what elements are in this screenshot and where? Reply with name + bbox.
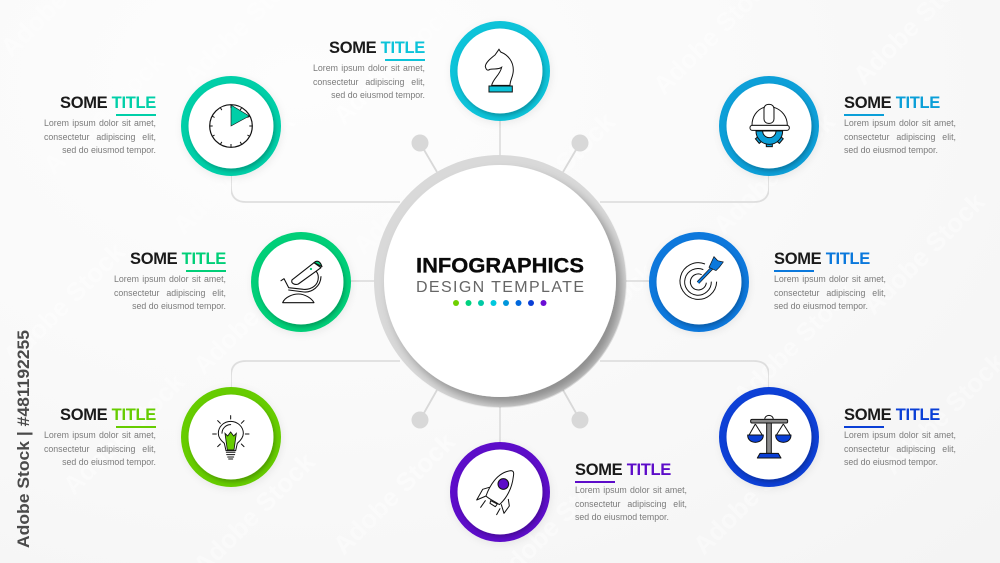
text: microscope: Lorem ipsum dolor sit amet, xyxy=(114,274,226,284)
text: target xyxy=(774,250,886,311)
stock id label: Adobe Stock | #481192255 xyxy=(14,330,33,548)
text: bulb: Lorem ipsum dolor sit amet, xyxy=(44,430,156,440)
watermark pattern: Adobe Stock xyxy=(327,426,461,560)
panel: scales xyxy=(719,387,956,489)
panel: target xyxy=(649,104,886,458)
panel: rocket xyxy=(450,442,687,544)
text: bulb: sed do eiusmod tempor. xyxy=(62,457,156,467)
text: bulb xyxy=(44,406,156,467)
text: chess: sed do eiusmod tempor. xyxy=(331,90,425,100)
text: target: sed do eiusmod tempor. xyxy=(774,301,868,311)
text: target: SOME TITLE xyxy=(774,250,870,268)
text: clock: sed do eiusmod tempor. xyxy=(62,145,156,155)
text: rocket: consectetur adipiscing elit, xyxy=(575,498,687,508)
text: helmet: consectetur adipiscing elit, xyxy=(844,132,956,142)
text: clock: Lorem ipsum dolor sit amet, xyxy=(44,118,156,128)
text: scales: sed do eiusmod tempor. xyxy=(844,457,938,467)
text: rocket xyxy=(575,461,687,522)
text: helmet: SOME TITLE xyxy=(844,94,940,112)
watermark pattern: Adobe Stock xyxy=(327,0,461,130)
panel: bulb xyxy=(44,387,282,489)
text: microscope xyxy=(114,250,226,311)
watermark pattern: Adobe Stock xyxy=(857,186,991,320)
central heading: DESIGN TEMPLATE xyxy=(416,279,584,296)
panel: microscope xyxy=(114,232,352,334)
text: clock: consectetur adipiscing elit, xyxy=(44,132,156,142)
text: target: Lorem ipsum dolor sit amet, xyxy=(774,274,886,284)
small connector dots xyxy=(412,134,588,428)
text: rocket: sed do eiusmod tempor. xyxy=(575,512,669,522)
text: scales xyxy=(844,406,956,467)
connector lines xyxy=(231,121,769,442)
panel: clock xyxy=(44,76,282,178)
text: helmet xyxy=(844,94,956,155)
text: chess: consectetur adipiscing elit, xyxy=(313,76,425,86)
central heading: INFOGRAPHICS xyxy=(416,254,584,278)
text: rocket: SOME TITLE xyxy=(575,461,671,479)
central circle xyxy=(374,155,627,408)
panel: helmet xyxy=(719,76,956,178)
watermark pattern: Adobe Stock xyxy=(0,236,131,370)
watermark pattern: Adobe Stock xyxy=(187,246,321,380)
text: helmet: sed do eiusmod tempor. xyxy=(844,145,938,155)
text: chess xyxy=(313,39,425,100)
text: scales: Lorem ipsum dolor sit amet, xyxy=(844,430,956,440)
panel: chess xyxy=(209,21,551,142)
text: clock xyxy=(44,58,490,155)
watermark pattern: Adobe Stock xyxy=(57,366,191,500)
text: rocket: Lorem ipsum dolor sit amet, xyxy=(575,485,687,495)
text: helmet: Lorem ipsum dolor sit amet, xyxy=(844,118,956,128)
colored dots row xyxy=(453,300,546,306)
watermark pattern: Adobe Stock xyxy=(167,106,301,240)
text: clock: SOME TITLE xyxy=(60,94,156,112)
central heading xyxy=(416,254,584,296)
text: chess: Lorem ipsum dolor sit amet, xyxy=(313,63,425,73)
watermark pattern: Adobe Stock xyxy=(347,126,481,260)
text: target: consectetur adipiscing elit, xyxy=(774,288,886,298)
text: microscope: sed do eiusmod tempor. xyxy=(132,301,226,311)
text: bulb: consectetur adipiscing elit, xyxy=(44,444,156,454)
watermark pattern: Adobe Stock xyxy=(487,106,621,240)
watermark pattern: Adobe Stock xyxy=(37,46,171,180)
text: scales: consectetur adipiscing elit, xyxy=(844,444,956,454)
text: chess: SOME TITLE xyxy=(329,39,425,57)
text: scales: SOME TITLE xyxy=(844,406,940,424)
text: microscope: SOME TITLE xyxy=(130,250,226,268)
watermark pattern: Adobe Stock xyxy=(687,426,821,560)
text: microscope: consectetur adipiscing elit, xyxy=(114,288,226,298)
text: bulb: SOME TITLE xyxy=(60,406,156,424)
watermark pattern: Adobe Stock xyxy=(727,276,861,410)
watermark pattern: Adobe Stock xyxy=(527,256,661,390)
watermark pattern: Adobe Stock xyxy=(707,106,841,240)
